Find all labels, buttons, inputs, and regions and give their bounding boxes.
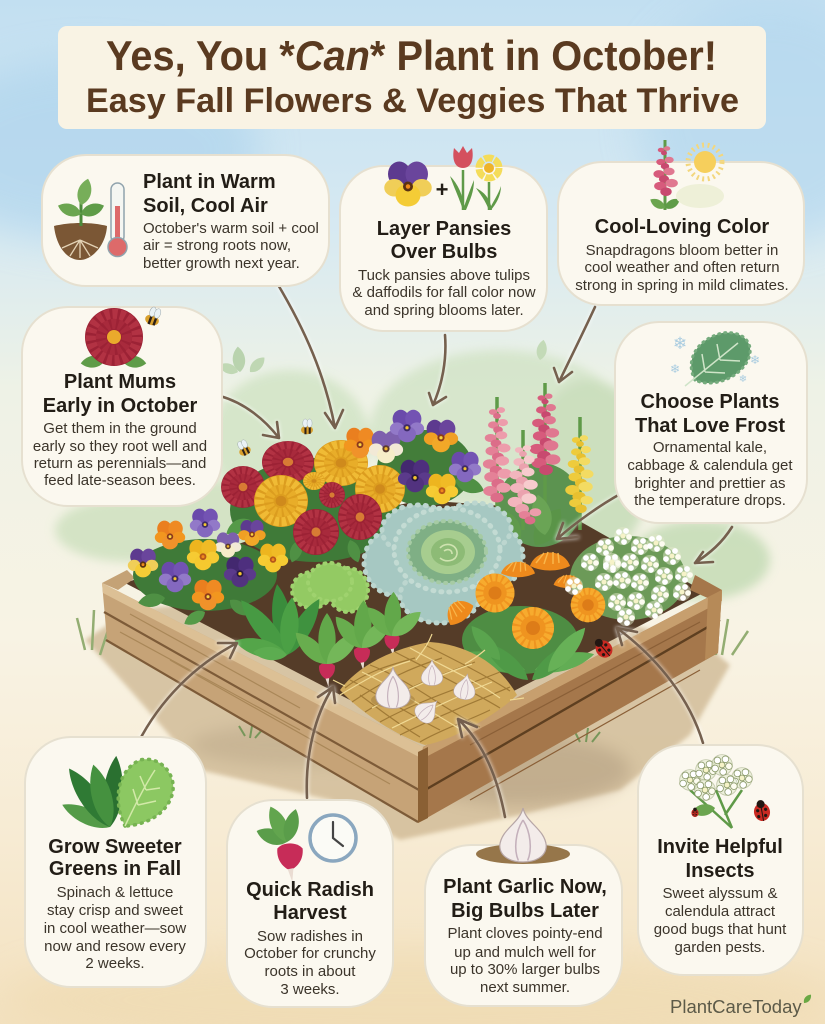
brand logo: PlantCareToday: [670, 996, 802, 1017]
marigolds: [440, 552, 605, 686]
icon: pansy plus tulip and daffodil: [384, 146, 501, 210]
sweet alyssum: [565, 527, 693, 626]
icon: red mum and bee: [80, 305, 163, 369]
body text: the temperature drops.: [634, 492, 786, 509]
bees near mums: [235, 419, 313, 457]
heading: Plant Mums: [64, 371, 176, 393]
icon: kale leaf and snowflakes: ❄: [739, 374, 747, 385]
body text: up to 30% larger bulbs: [450, 961, 600, 978]
body text: return as perennials—and: [34, 455, 206, 472]
icon: kale leaf and snowflakes: ❄: [673, 334, 687, 353]
body text: roots in about: [265, 963, 356, 980]
panel: cool-loving color: [558, 140, 804, 305]
raised garden bed: [102, 500, 722, 823]
body text: October's warm soil + cool: [143, 220, 319, 237]
body text: Spinach & lettuce: [57, 884, 173, 901]
body text: and spring blooms later.: [364, 302, 524, 319]
body text: Plant cloves pointy-end: [447, 925, 603, 942]
heading: Plant Garlic Now,: [443, 876, 607, 898]
body text: strong in spring in mild climates.: [575, 277, 789, 294]
body text: air = strong roots now,: [143, 237, 291, 254]
top pansies: [344, 410, 481, 504]
icon: alyssum and ladybug: [680, 755, 771, 828]
body text: good bugs that hunt: [654, 921, 787, 938]
right wall: [418, 590, 722, 823]
body text: early so they root well and: [33, 438, 207, 455]
body text: next summer.: [480, 979, 570, 996]
heading: Quick Radish: [246, 879, 374, 901]
heading: Harvest: [273, 902, 347, 924]
body text: Tuck pansies above tulips: [358, 267, 530, 284]
icon: kale leaf and snowflakes: [670, 333, 760, 386]
panel: grow sweeter greens: [25, 737, 206, 987]
mums: [221, 440, 405, 555]
body text: up and mulch well for: [454, 944, 596, 961]
radishes: [290, 592, 425, 687]
panel: plant garlic now: [425, 808, 622, 1006]
heading: Early in October: [43, 395, 197, 417]
icon: spinach and lettuce: [59, 755, 173, 834]
icon: snapdragon and sun: [648, 140, 724, 212]
body text: garden pests.: [675, 939, 765, 956]
title line one: Yes, You *Can* Plant in October!: [106, 32, 717, 79]
back wood rails: [102, 570, 135, 590]
snapdragons: [478, 383, 594, 551]
heading: Plant in Warm: [143, 171, 276, 193]
icon: pansy plus tulip and daffodil: +: [436, 177, 448, 202]
title banner: [58, 26, 766, 129]
icon: kale leaf and snowflakes: ❄: [670, 362, 680, 376]
heading: Grow Sweeter: [48, 836, 182, 858]
panel: choose plants that love frost: [615, 322, 807, 523]
heading: Cool-Loving Color: [595, 216, 769, 238]
body text: stay crisp and sweet: [47, 902, 184, 919]
body text: Ornamental kale,: [653, 439, 767, 456]
heading: Greens in Fall: [49, 858, 181, 880]
panel: plant mums early: [22, 305, 222, 506]
arrows: [138, 283, 732, 817]
ladybug in bed: [590, 635, 616, 661]
body text: Sweet alyssum &: [662, 885, 778, 902]
ground shadow: [77, 580, 748, 840]
corner post: [418, 747, 428, 823]
heading: Choose Plants: [641, 391, 779, 413]
body text: cool weather and often return: [584, 259, 780, 276]
heading: That Love Frost: [635, 415, 785, 437]
icon: radish and clock: [254, 803, 356, 882]
body text: better growth next year.: [143, 255, 300, 272]
panel: quick radish harvest: [227, 800, 393, 1007]
lettuce and spinach: [232, 563, 368, 663]
body text: Snapdragons bloom better in: [586, 242, 778, 259]
body text: calendula attract: [665, 903, 776, 920]
body text: cabbage & calendula get: [627, 457, 793, 474]
body text: 2 weeks.: [85, 955, 145, 972]
panel: invite helpful insects: [638, 745, 803, 975]
left wall: [102, 583, 423, 823]
body text: 3 weeks.: [280, 981, 340, 998]
body text: now and resow every: [44, 938, 186, 955]
body text: brighter and prettier as: [635, 475, 785, 492]
heading: Insects: [686, 860, 754, 882]
body text: in cool weather—sow: [44, 920, 186, 937]
icon: seedling and thermometer: [54, 177, 127, 260]
heading: Big Bulbs Later: [451, 900, 599, 922]
heading: Soil, Cool Air: [143, 195, 268, 217]
bed foliage base: [133, 430, 686, 674]
title line two: Easy Fall Flowers & Veggies That Thrive: [86, 82, 739, 120]
panel: layer pansies over bulbs: [340, 146, 547, 331]
background foliage: [55, 339, 770, 600]
panel: plant in warm soil: [42, 155, 329, 286]
garlic in straw mulch: [333, 634, 524, 745]
soil: [125, 500, 705, 738]
icon: brand leaf: [802, 993, 813, 1005]
body text: Sow radishes in: [257, 928, 363, 945]
body text: October for crunchy: [244, 945, 376, 962]
icon: garlic bulb on soil: [476, 808, 570, 864]
body text: feed late-season bees.: [44, 472, 196, 489]
heading: Invite Helpful: [657, 836, 783, 858]
body text: Get them in the ground: [43, 420, 197, 437]
body text: & daffodils for fall color now: [352, 284, 536, 301]
ornamental kale: [364, 503, 523, 623]
heading: Layer Pansies: [377, 218, 511, 240]
heading: Over Bulbs: [391, 241, 497, 263]
left pansies: [128, 509, 288, 610]
icon: kale leaf and snowflakes: ❄: [750, 353, 760, 367]
